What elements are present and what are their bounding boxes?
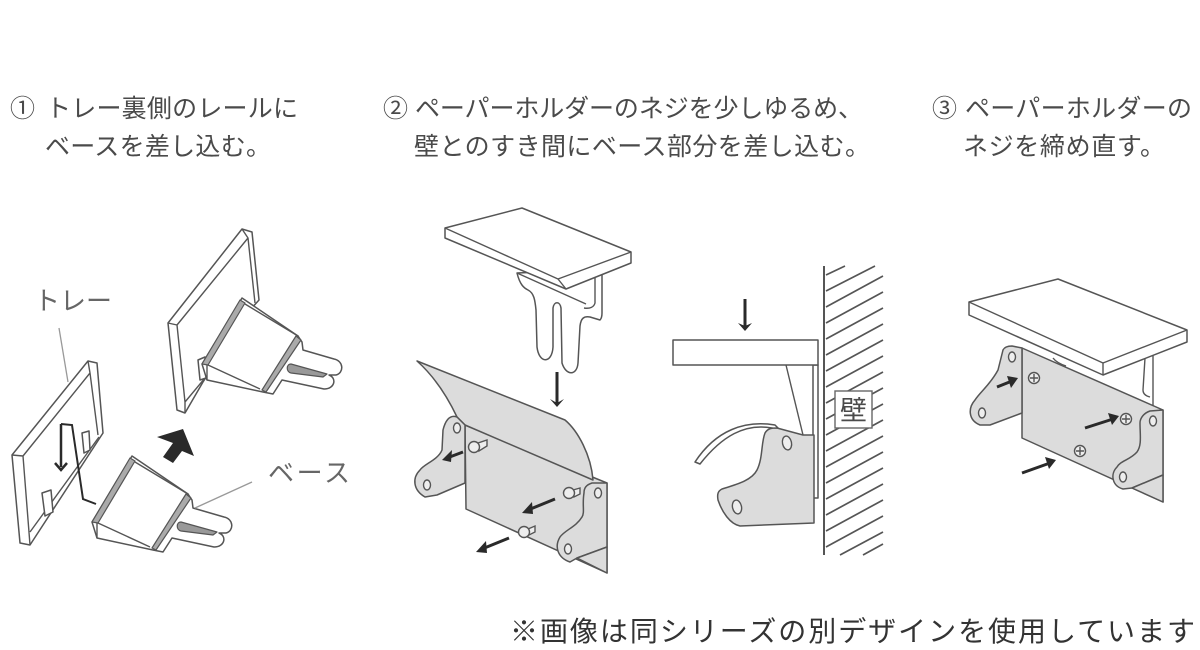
diagram: tightened plate — [970, 346, 1163, 502]
heading: step 2: ② — [383, 95, 408, 123]
diagram: shelf with holder, raised — [445, 208, 631, 373]
heading: step 2 — [383, 95, 870, 161]
diagram: tray before insertion — [12, 361, 103, 545]
leader: base — [195, 482, 252, 508]
arrows: screw loosen direction — [442, 450, 555, 553]
diagram: base after insertion — [202, 298, 342, 394]
label: wall — [835, 391, 872, 428]
label: base: ベース — [268, 458, 350, 488]
arrow: side view down — [738, 299, 752, 331]
heading: step 3: ペーパーホルダーの — [965, 95, 1192, 123]
heading: step 1: ベースを差し込む。 — [45, 133, 271, 161]
heading: step 1 — [10, 95, 298, 161]
icon: tightened screws — [1028, 372, 1132, 456]
diagram: base before insertion — [92, 456, 232, 552]
heading: step 3 — [932, 95, 1192, 161]
icon: screws — [468, 440, 580, 538]
label: wall: 壁 — [840, 396, 867, 426]
arrow: down to wall — [550, 372, 564, 407]
heading: step 1: トレー裏側のレールに — [46, 95, 298, 123]
diagram: tray after insertion — [168, 229, 259, 413]
arrow: slide rail path — [55, 424, 96, 504]
diagram: wall plate with screws loosened — [415, 361, 607, 573]
leader: tray — [59, 328, 68, 382]
diagram: side view of shelf — [673, 340, 818, 526]
heading: step 2: ペーパーホルダーのネジを少しゆるめ、 — [415, 95, 863, 123]
heading: step 3: ネジを締め直す。 — [963, 133, 1165, 161]
diagram: wall hatching — [824, 266, 883, 555]
label: tray: トレー — [34, 286, 112, 316]
heading: step 2: 壁とのすき間にベース部分を差し込む。 — [414, 133, 870, 161]
footnote: ※画像は同シリーズの別デザインを使用しています — [510, 616, 1195, 647]
heading: step 1: ① — [10, 95, 35, 123]
diagram: finished shelf — [969, 279, 1187, 407]
heading: step 3: ③ — [932, 95, 957, 123]
arrow: bold up arrow — [157, 429, 194, 463]
arrows: screw tighten direction — [997, 376, 1119, 473]
